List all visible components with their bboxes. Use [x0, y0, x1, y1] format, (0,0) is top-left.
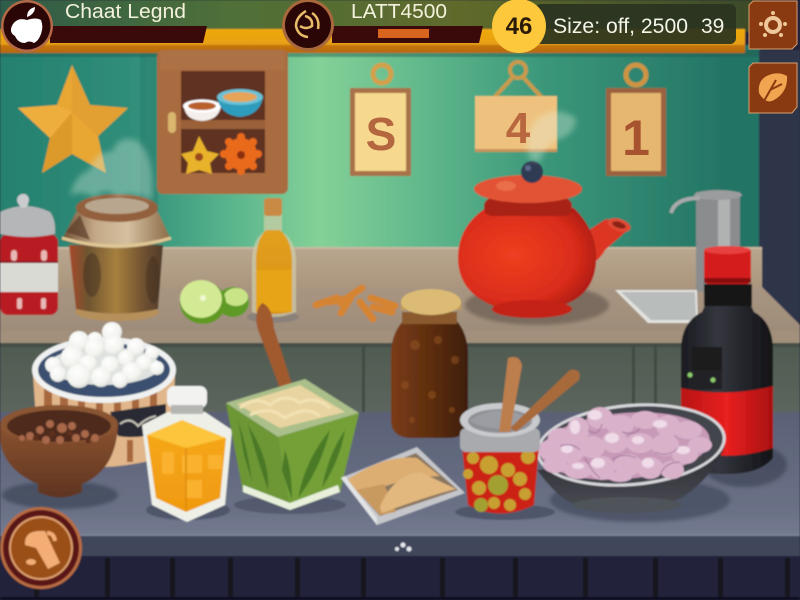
score progress bar	[332, 26, 483, 43]
hanging sign 4	[475, 62, 557, 152]
steam above brass pot	[70, 139, 152, 200]
wall tap	[671, 190, 742, 292]
yellow star ornament	[181, 136, 219, 174]
size text: 39	[701, 15, 724, 38]
brown bowl shadow	[2, 481, 118, 509]
size text: Size: off, 2500	[553, 15, 688, 38]
number on sign 1: 1	[622, 110, 650, 166]
jar white cap	[167, 386, 207, 414]
score icon	[282, 0, 334, 51]
leaf action button	[749, 63, 797, 113]
pan shadow	[550, 478, 730, 522]
blue bowl on shelf	[217, 89, 263, 117]
wall star decoration	[18, 65, 128, 173]
score label: LATT4500	[351, 1, 447, 23]
white bowl on shelf	[183, 100, 221, 121]
bottle red band	[681, 386, 773, 456]
steel sink	[615, 290, 698, 323]
cabinet knob	[168, 112, 176, 133]
lime slices	[180, 280, 249, 324]
orange flower ornament	[220, 133, 262, 175]
brown bowl with nuts	[0, 405, 118, 498]
hanging sign S	[350, 65, 411, 176]
nuts	[19, 420, 99, 444]
letter on sign S: S	[366, 108, 396, 160]
level number: 46	[506, 13, 532, 40]
bottle red cap	[704, 246, 752, 306]
number on sign 4: 4	[506, 104, 531, 153]
top right menu button	[749, 1, 797, 49]
red and silver jar	[0, 194, 58, 315]
onion petals	[538, 407, 712, 482]
player progress bar	[50, 26, 207, 43]
glass oil bottle	[247, 198, 299, 323]
mango juice jar	[142, 386, 232, 522]
teapot spout	[574, 219, 630, 268]
samosa tray	[341, 447, 465, 525]
white dumplings	[45, 322, 164, 388]
pickle jar shadow	[455, 504, 555, 520]
score panel	[282, 0, 483, 51]
header bar	[0, 0, 760, 53]
wooden spoon in noodles	[256, 303, 300, 412]
tub decorative band	[110, 404, 166, 437]
pickle jar with wooden spoons	[460, 357, 580, 514]
player avatar: apple icon	[1, 0, 53, 52]
bottom left round button	[0, 507, 82, 589]
red teapot	[458, 161, 632, 318]
wooden wall cabinet	[157, 50, 288, 194]
player name: Chaat Legnd	[65, 1, 186, 23]
green glass with noodles	[226, 379, 359, 514]
brown chutney jar	[391, 289, 468, 438]
wooden tub	[32, 322, 176, 467]
bottle panel	[688, 347, 722, 389]
turmeric pieces	[316, 288, 395, 319]
teapot shadow	[465, 285, 609, 325]
size status pill	[492, 0, 736, 53]
pagination dots	[395, 542, 412, 552]
pan of sliced onions	[533, 396, 729, 513]
black sauce bottle	[681, 246, 787, 487]
brass pot	[62, 194, 171, 321]
steam above teapot	[527, 112, 576, 162]
hanging sign 1	[606, 65, 666, 176]
teapot lid	[474, 161, 582, 203]
player panel	[1, 0, 207, 52]
